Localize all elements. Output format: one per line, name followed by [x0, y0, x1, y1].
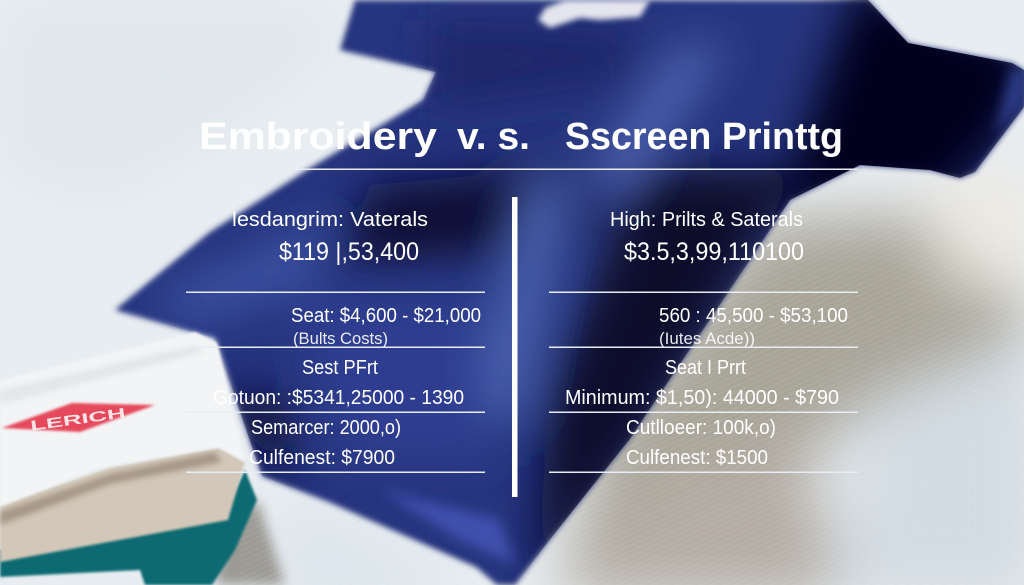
grey shadow near folded stack [215, 500, 285, 585]
row: semarcer: Semarcer: 2000,o) [251, 417, 401, 439]
red logo badge [2, 403, 155, 434]
white shirt [0, 332, 245, 507]
row: cheapest: Culfenest: $1500 [626, 447, 768, 469]
fold shadow [0, 452, 222, 525]
row: cutlloeer: Cutlloeer: 100k,o) [626, 417, 776, 439]
note: parenthetical: (Iutes Acde)) [659, 329, 755, 348]
row: seat price range: 560 : 45,500 - $53,100 [659, 305, 848, 327]
note: bulk costs: (Bults Costs) [293, 329, 388, 348]
price: screen printing total: $3.5,3,99,110100 [624, 238, 804, 266]
price: embroidery total: $119 |,53,400 [279, 238, 419, 266]
fold highlight [0, 345, 205, 405]
row: minimum range: Minimum: $1,50): 44000 - $790 [565, 387, 839, 409]
red logo badge: LERICH [29, 404, 127, 434]
row: cotton range: Gotuon: :$5341,25000 - 1390 [213, 387, 464, 409]
row: cheapest: Culfenest: $7900 [249, 447, 395, 469]
row heading: best print: Sest PFrt [302, 357, 378, 379]
column: screen printing [549, 209, 858, 473]
collar: white tag [538, 0, 650, 28]
heading: embroidery materials: lesdangrim: Vaterals [232, 209, 428, 231]
column: embroidery [186, 209, 485, 473]
heading: printing materials: High: Prilts & Saterals [610, 209, 803, 231]
row heading: seat print: Seat I Prrt [665, 357, 746, 379]
title: Sscreen Printtg [565, 116, 843, 158]
title: Embroidery [199, 116, 437, 158]
center divider [512, 197, 518, 497]
title rule [186, 168, 858, 170]
title: v. s. [457, 116, 530, 158]
title [199, 116, 843, 158]
folded shirts stack [0, 332, 257, 585]
beige shirt [0, 448, 245, 562]
teal shirt [0, 470, 257, 585]
row: seat price: Seat: $4,600 - $21,000 [291, 305, 481, 327]
